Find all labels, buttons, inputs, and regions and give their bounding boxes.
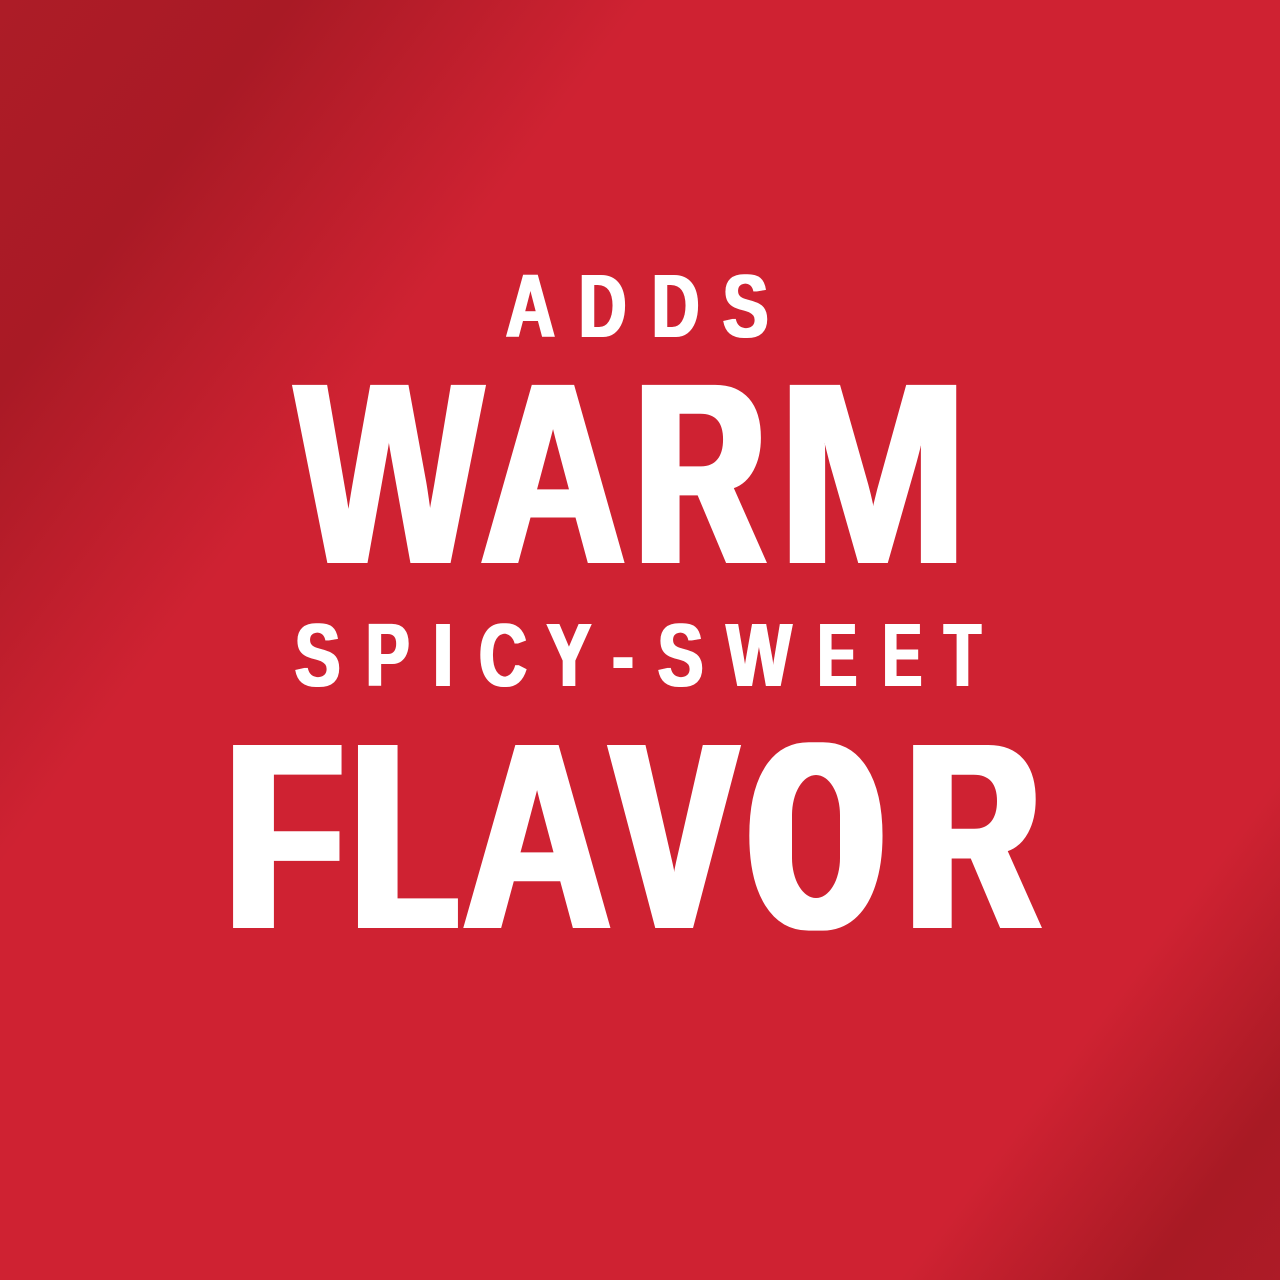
heading line: FLAVOR: L — [355, 687, 455, 985]
heading line: SPICY-SWEET: S — [295, 605, 340, 705]
heading line: FLAVOR: V — [611, 688, 737, 984]
heading line: FLAVOR: R — [907, 688, 1040, 985]
heading line: ADDS — [506, 256, 768, 356]
heading line: FLAVOR: O — [749, 688, 883, 985]
heading line: SPICY-SWEET: E — [883, 606, 922, 706]
heading line: SPICY-SWEET: Y — [547, 604, 591, 705]
heading line: WARM: M — [777, 328, 969, 618]
heading line: WARM — [295, 328, 969, 619]
heading line: FLAVOR: F — [228, 687, 341, 985]
heading line: SPICY-SWEET: W — [727, 604, 792, 705]
heading line: SPICY-SWEET: I — [433, 604, 453, 706]
heading line: SPICY-SWEET: S — [658, 605, 703, 705]
heading line: SPICY-SWEET: C — [479, 604, 527, 705]
heading line: SPICY-SWEET: E — [818, 606, 857, 706]
heading line: WARM: W — [295, 330, 484, 619]
heading line: ADDS: A — [506, 256, 555, 356]
heading line: FLAVOR — [228, 687, 1040, 985]
heading line: WARM: A — [480, 330, 626, 619]
heading line: SPICY-SWEET: P — [366, 605, 409, 705]
heading line: SPICY-SWEET: - — [613, 606, 633, 706]
heading line: ADDS: D — [652, 256, 699, 356]
heading line: FLAVOR: A — [462, 687, 612, 985]
heading line: ADDS: D — [579, 256, 626, 356]
heading line: SPICY-SWEET — [295, 604, 981, 706]
heading line: SPICY-SWEET: T — [944, 606, 981, 706]
heading line: ADDS: S — [723, 256, 768, 356]
heading line: WARM: R — [636, 330, 765, 619]
